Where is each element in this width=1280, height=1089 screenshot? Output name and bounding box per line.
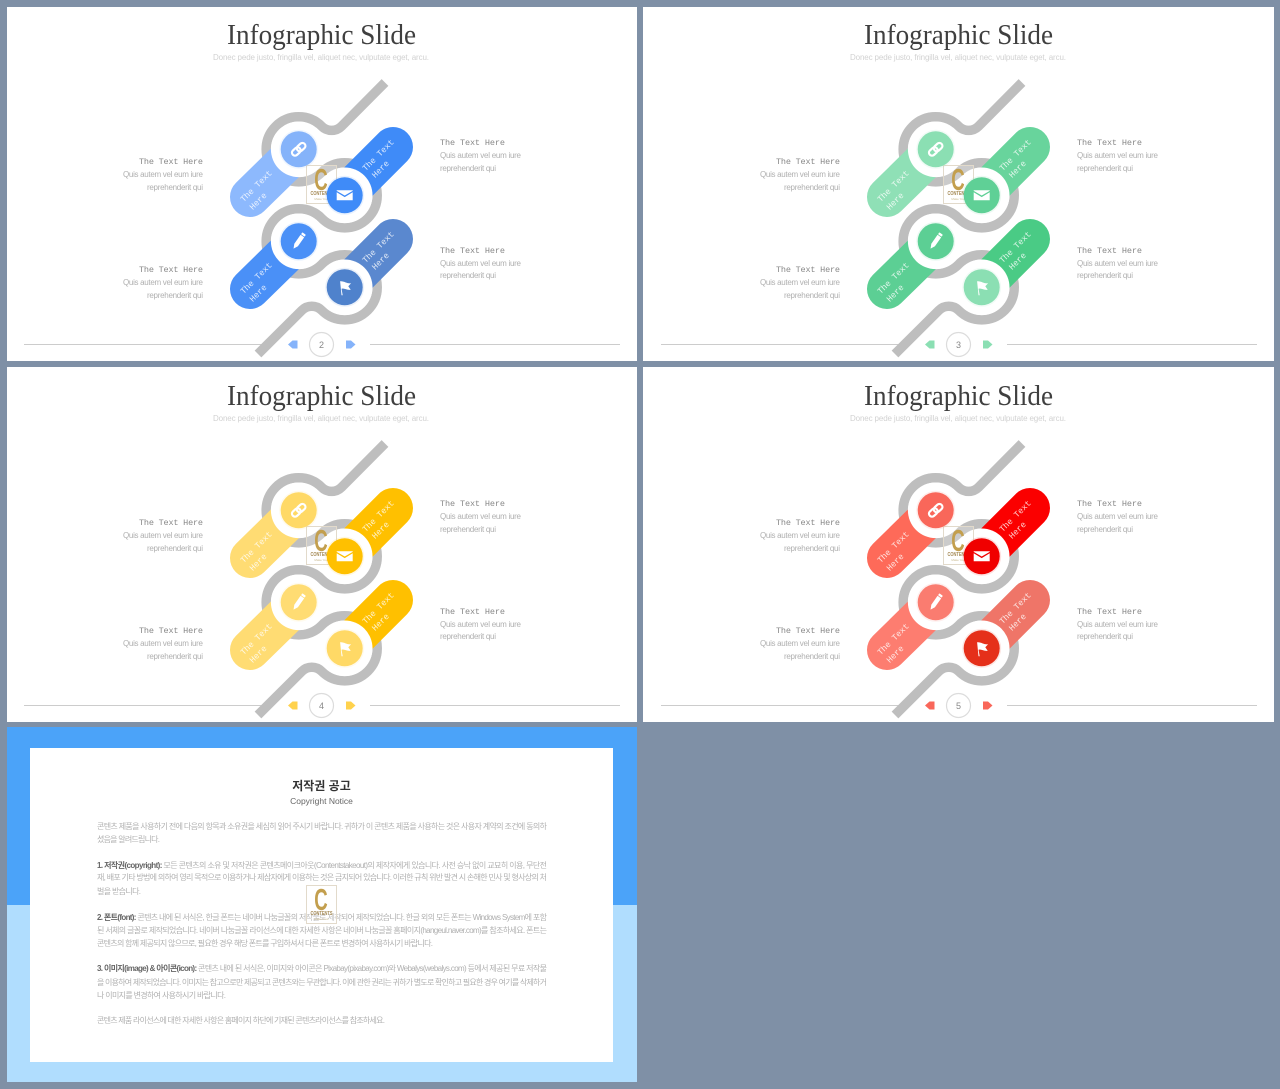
capsule text 3: Here — [885, 644, 906, 665]
capsule text 1: Here — [885, 552, 906, 573]
intro paragraph: 콘텐츠 제품을 사용하기 전에 다음의 항목과 소유권을 세심히 읽어 주시기 바랍니다. 귀하가 이 콘텐츠 제품을 사용하는 것은 사용자 계약의 조건에 동의하 — [97, 821, 548, 831]
text block left top: reprehenderit qui — [784, 544, 840, 553]
capsule text 2: Here — [370, 520, 392, 541]
text block left bottom — [123, 626, 204, 661]
title: Infographic Slide — [227, 19, 416, 51]
white halos — [908, 122, 1010, 315]
icon: envelope — [325, 176, 364, 215]
text block left top: The Text Here — [776, 157, 840, 167]
closing paragraph: 콘텐츠 제품 라이선스에 대한 자세한 사항은 홈페이지 하단에 기재된 콘텐츠라이선스를 참조하세요. — [97, 1015, 385, 1025]
text block left bottom: reprehenderit qui — [784, 291, 840, 300]
capsule text 1: The Text — [239, 530, 275, 566]
text block left top — [760, 157, 841, 192]
text block right top: Quis autem vel eum iure — [1077, 512, 1159, 521]
capsule text 1: The Text — [239, 169, 275, 205]
text block left top: reprehenderit qui — [147, 183, 203, 192]
text block right bottom — [440, 607, 522, 641]
capsule text 2: The Text — [998, 499, 1034, 535]
capsule 3 — [887, 602, 936, 650]
page navigation: 3 — [956, 340, 961, 350]
panel: yellow slide — [7, 367, 637, 722]
icon: link — [916, 130, 955, 169]
icon: pencil — [279, 583, 318, 622]
text block right top: The Text Here — [440, 499, 505, 509]
icon: envelope — [325, 537, 364, 576]
icon: pencil — [279, 222, 318, 261]
text block right bottom: reprehenderit qui — [440, 271, 496, 280]
icon: envelope — [962, 537, 1001, 576]
panel: green slide — [643, 7, 1274, 361]
footer line right — [370, 344, 620, 346]
notice title: 저작권 공고 — [292, 778, 351, 793]
title: Infographic Slide — [864, 380, 1053, 412]
text block right top: The Text Here — [1077, 499, 1142, 509]
page navigation — [925, 694, 992, 718]
capsule 2 — [982, 147, 1030, 195]
capsule text 4: Here — [370, 612, 392, 633]
panel: copyright notice — [7, 727, 637, 1082]
icon: pencil — [916, 583, 955, 622]
text block right bottom — [1077, 246, 1159, 280]
capsule text 4: Here — [1007, 612, 1029, 633]
capsule 1 — [250, 510, 299, 558]
text block right top: Quis autem vel eum iure — [440, 512, 522, 521]
text block right bottom: Quis autem vel eum iure — [1077, 620, 1159, 629]
text block left bottom — [760, 265, 841, 300]
icon: flag — [325, 629, 364, 668]
footer line left — [661, 344, 899, 346]
capsule text 1: The Text — [876, 169, 912, 205]
capsule 1 — [250, 149, 299, 197]
capsule text 3: Here — [248, 644, 269, 665]
text block right bottom: reprehenderit qui — [1077, 632, 1133, 641]
winding road — [895, 82, 1022, 354]
winding road — [258, 444, 385, 715]
text block left bottom: reprehenderit qui — [147, 652, 203, 661]
capsule 4 — [982, 239, 1030, 287]
text block left top — [123, 157, 204, 192]
icon: flag — [962, 268, 1001, 307]
paragraph 3 image and icon — [97, 963, 547, 1000]
capsule text 4: The Text — [361, 591, 397, 627]
text block left bottom: The Text Here — [139, 265, 203, 275]
icon: flag — [962, 629, 1001, 668]
capsule 1 — [887, 149, 936, 197]
capsule text 3: Here — [248, 283, 269, 304]
text block left bottom — [123, 265, 204, 300]
text block right bottom: The Text Here — [440, 607, 505, 617]
text block right bottom: reprehenderit qui — [1077, 271, 1133, 280]
text block left top: The Text Here — [776, 518, 840, 528]
white halos — [271, 482, 373, 676]
capsule text 4: The Text — [998, 230, 1034, 266]
text block left top — [760, 518, 841, 553]
footer line right — [370, 704, 620, 706]
text block left bottom: reprehenderit qui — [784, 652, 840, 661]
paragraph 1 copyright: 1. 저작권(copyright): 모든 콘텐츠의 소유 및 저작권은 콘텐츠메이크아웃(Contentstakeout)의 제작자에게 있습니다. 사전 승낙 없이 교묘히 이용, 무단전 — [97, 860, 547, 870]
capsule text 2: The Text — [361, 499, 397, 535]
paragraph 2 font: 된 서체의 글꼴로 제작되었습니다. 네이버 나눔글꼴 라이선스에 대한 자세한 사항은 네이버 나눔글꼴 홈페이지(hangeul.naver.com)를 참조하세요. 폰트는 — [97, 925, 547, 935]
text block left top: reprehenderit qui — [147, 544, 203, 553]
text block left top: reprehenderit qui — [784, 183, 840, 192]
text block left top: The Text Here — [139, 157, 203, 167]
capsule 3 — [250, 602, 299, 650]
text block left top: Quis autem vel eum iure — [760, 170, 841, 179]
text block left top: The Text Here — [139, 518, 203, 528]
page navigation: 4 — [319, 701, 324, 711]
text block left top: Quis autem vel eum iure — [760, 531, 841, 540]
capsule 4 — [345, 239, 393, 287]
subtitle: Donec pede justo, fringilla vel, aliquet nec, vulputate eget, arcu. — [850, 53, 1066, 62]
capsule text 3: The Text — [876, 622, 912, 658]
panel: red slide — [643, 367, 1274, 722]
intro paragraph — [97, 821, 548, 844]
text block right bottom — [440, 246, 522, 280]
text block left bottom: The Text Here — [776, 626, 840, 636]
paragraph 3 image and icon: 3. 이미지(image) & 아이콘(icon): 콘텐츠 내에 된 서식은, 이미지와 아이콘은 Pixabay(pixabay.com)와 Webalys(webalys.com) 등에서 제공된 무료 저작물 — [97, 963, 547, 973]
text block left bottom: Quis autem vel eum iure — [123, 278, 204, 287]
text block right top: The Text Here — [1077, 138, 1142, 148]
footer line left — [661, 704, 899, 706]
text block left bottom — [760, 626, 841, 661]
text block right top: Quis autem vel eum iure — [440, 151, 522, 160]
paragraph 3 image and icon: 을 이용하여 제작되었습니다. 이미지는 참고으로만 제공되고 콘텐츠와는 무관합니다. 이에 관한 권리는 귀하가 별도로 확인하고 필요한 경우 여기를 삭제하거 — [97, 977, 547, 987]
page navigation: 5 — [956, 701, 961, 711]
logo watermark — [306, 524, 336, 564]
page navigation — [288, 332, 356, 356]
page navigation: 2 — [319, 340, 324, 350]
footer line right — [1007, 704, 1257, 706]
paragraph 2 font — [97, 912, 548, 948]
paragraph 1 copyright: 벌을 받습니다. — [97, 886, 141, 896]
text block right top: reprehenderit qui — [1077, 164, 1133, 173]
subtitle: Donec pede justo, fringilla vel, aliquet nec, vulputate eget, arcu. — [213, 414, 429, 423]
paragraph 2 font: 콘텐츠의 함께 제공되지 않으므로, 필요한 경우 해당 폰트를 구입하셔서 다른 폰트로 변경하여 사용하시기 바랍니다. — [97, 938, 433, 948]
text block right top — [1077, 138, 1159, 173]
text block right top: reprehenderit qui — [440, 525, 496, 534]
capsule 4 — [982, 600, 1030, 648]
icon: link — [279, 130, 318, 169]
subtitle: Donec pede justo, fringilla vel, aliquet nec, vulputate eget, arcu. — [213, 53, 429, 62]
capsule text 4: The Text — [361, 230, 397, 266]
capsule text 4: Here — [1007, 251, 1029, 272]
winding road — [895, 444, 1022, 715]
text block right top — [440, 138, 522, 173]
title: Infographic Slide — [864, 19, 1053, 51]
footer line left — [24, 344, 262, 346]
capsule 1 — [887, 510, 936, 558]
text block right top: Quis autem vel eum iure — [1077, 151, 1159, 160]
text block right top — [440, 499, 522, 534]
capsule text 2: Here — [1007, 159, 1029, 180]
capsule text 3: The Text — [239, 261, 275, 297]
text block left bottom: Quis autem vel eum iure — [760, 639, 841, 648]
capsule text 2: The Text — [361, 138, 397, 174]
white halos — [271, 122, 373, 315]
icon: link — [279, 491, 318, 530]
capsule text 4: The Text — [998, 591, 1034, 627]
text block left bottom: The Text Here — [139, 626, 203, 636]
text block right bottom: Quis autem vel eum iure — [440, 620, 522, 629]
white halos — [908, 482, 1010, 676]
capsule text 1: Here — [885, 191, 906, 212]
logo watermark — [306, 163, 336, 204]
text block right bottom: The Text Here — [440, 246, 505, 256]
capsule text 1: Here — [248, 552, 269, 573]
icon: pencil — [916, 222, 955, 261]
page navigation — [288, 694, 356, 718]
paragraph 3 image and icon: 나 이미지를 변경하여 사용하시기 바랍니다. — [97, 990, 226, 1000]
text block right bottom — [1077, 607, 1159, 641]
text block right top — [1077, 499, 1159, 534]
capsule text 3: Here — [885, 283, 906, 304]
capsule text 1: The Text — [876, 530, 912, 566]
paragraph 1 copyright: 재, 배포 기타 방법에 의하여 영리 목적으로 이용하거나 제삼자에게 이용하는 것은 금지되어 있습니다. 이러한 규칙 위반 발견 시 손해한 민사 및 형사상의 처 — [97, 872, 547, 882]
page navigation — [925, 332, 992, 356]
footer line left — [24, 704, 262, 706]
text block right bottom: reprehenderit qui — [440, 632, 496, 641]
text block left bottom: Quis autem vel eum iure — [123, 639, 204, 648]
capsule 4 — [345, 600, 393, 648]
text block left top: Quis autem vel eum iure — [123, 531, 204, 540]
capsule text 3: The Text — [239, 622, 275, 658]
text block right bottom: Quis autem vel eum iure — [1077, 259, 1159, 268]
capsule 2 — [345, 508, 393, 556]
capsule text 2: The Text — [998, 138, 1034, 174]
capsule 3 — [250, 241, 299, 289]
logo watermark — [944, 524, 974, 564]
text block right bottom: The Text Here — [1077, 246, 1142, 256]
text block right top: reprehenderit qui — [440, 164, 496, 173]
text block left bottom: reprehenderit qui — [147, 291, 203, 300]
winding road — [258, 82, 385, 354]
text block right top: reprehenderit qui — [1077, 525, 1133, 534]
capsule text 2: Here — [370, 159, 392, 180]
icon: flag — [325, 268, 364, 307]
subtitle: Donec pede justo, fringilla vel, aliquet nec, vulputate eget, arcu. — [850, 414, 1066, 423]
text block left top: Quis autem vel eum iure — [123, 170, 204, 179]
text block left top — [123, 518, 204, 553]
capsule 2 — [345, 147, 393, 195]
paragraph 2 font: 2. 폰트(font): 콘텐츠 내에 된 서식은, 한글 폰트는 네이버 나눔글꼴의 저작물로 제작되어 제작되었습니다. 한글 외의 모든 폰트는 Windows System에 포함 — [97, 912, 548, 922]
paragraph 1 copyright — [97, 860, 547, 896]
footer line right — [1007, 344, 1257, 346]
text block right top: The Text Here — [440, 138, 505, 148]
icon: envelope — [962, 176, 1001, 215]
notice subtitle: Copyright Notice — [290, 796, 353, 806]
capsule text 4: Here — [370, 251, 392, 272]
capsule 3 — [887, 241, 936, 289]
intro paragraph: 셨음을 알려드립니다. — [97, 834, 160, 844]
text block left bottom: The Text Here — [776, 265, 840, 275]
capsule text 3: The Text — [876, 261, 912, 297]
text block left bottom: Quis autem vel eum iure — [760, 278, 841, 287]
title: Infographic Slide — [227, 380, 416, 412]
icon: link — [916, 491, 955, 530]
capsule text 2: Here — [1007, 520, 1029, 541]
capsule 2 — [982, 508, 1030, 556]
capsule text 1: Here — [248, 191, 269, 212]
logo watermark — [944, 163, 974, 204]
text block right bottom: The Text Here — [1077, 607, 1142, 617]
panel: blue slide — [7, 7, 637, 361]
text block right bottom: Quis autem vel eum iure — [440, 259, 522, 268]
logo watermark — [306, 883, 336, 924]
